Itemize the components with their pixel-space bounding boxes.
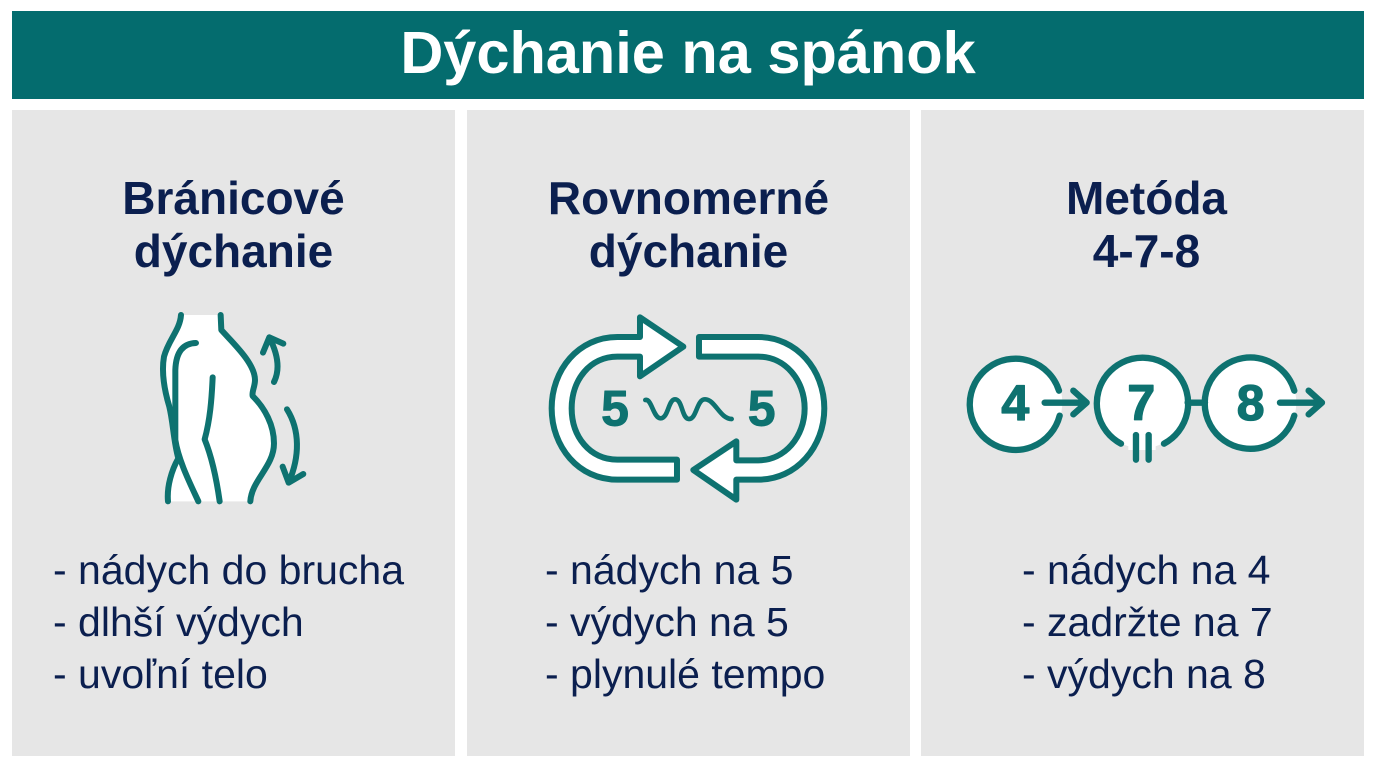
list: metóda 4-7-8: - zadržte na 7 (1022, 599, 1273, 645)
number 7: 7 (1127, 375, 1155, 431)
heading: rovnomerné dýchanie: Rovnomerné (548, 172, 829, 224)
arrow down (283, 409, 303, 483)
circle 8 (1205, 357, 1294, 449)
title: Dýchanie na spánok (400, 19, 976, 86)
number 5 left: 5 (601, 380, 629, 436)
heading: rovnomerné dýchanie: dýchanie (589, 225, 788, 277)
icon: equal breathing loop 5-5 (552, 317, 824, 500)
list: bránicové dýchanie: - uvoľní telo (53, 651, 268, 697)
heading: metóda 4-7-8: 4-7-8 (1093, 225, 1200, 277)
number 5 right: 5 (748, 380, 776, 436)
body outline: front and belly (221, 315, 274, 501)
pause bars (1136, 435, 1149, 460)
right loop arrow (693, 337, 824, 500)
heading: bránicové dýchanie: dýchanie (134, 225, 333, 277)
list: rovnomerné dýchanie: - plynulé tempo (545, 651, 825, 697)
circle 4 (970, 359, 1060, 450)
arm (175, 343, 198, 501)
arrow after 8 (1280, 391, 1322, 414)
arrow 4 to 7 (1045, 391, 1087, 414)
panel: bránicové dýchanie (12, 110, 455, 756)
list: rovnomerné dýchanie: - výdych na 5 (545, 599, 789, 645)
list: rovnomerné dýchanie (545, 547, 825, 697)
title (12, 11, 1364, 99)
body outline: back (163, 315, 181, 501)
body silhouette (163, 315, 274, 501)
number 4: 4 (1001, 375, 1029, 431)
connector (1188, 393, 1205, 412)
left loop arrow (552, 317, 683, 480)
number 8: 8 (1237, 375, 1265, 431)
icon: 4-7-8 sequence (970, 357, 1322, 460)
wave (645, 399, 732, 419)
list: metóda 4-7-8: - výdych na 8 (1022, 651, 1266, 697)
list: bránicové dýchanie: - nádych do brucha (53, 547, 404, 593)
circle 7 (1097, 358, 1188, 444)
heading: rovnomerné dýchanie (548, 172, 829, 277)
heading: metóda 4-7-8 (1066, 172, 1228, 277)
list: metóda 4-7-8 (1022, 547, 1273, 697)
heading: bránicové dýchanie (122, 172, 345, 277)
list: bránicové dýchanie (53, 547, 404, 697)
panel: rovnomerné dýchanie (467, 110, 910, 756)
white circle fills (971, 357, 1296, 450)
heading: metóda 4-7-8: Metóda (1066, 172, 1227, 224)
arrow up (263, 337, 283, 382)
list: metóda 4-7-8: - nádych na 4 (1022, 547, 1270, 593)
list: rovnomerné dýchanie: - nádych na 5 (545, 547, 793, 593)
panel: metóda 4-7-8 (921, 110, 1364, 756)
leg (205, 377, 220, 501)
list: bránicové dýchanie: - dlhší výdych (53, 599, 304, 645)
heading: bránicové dýchanie: Bránicové (122, 172, 345, 224)
icon: body with belly breathing (163, 315, 303, 501)
